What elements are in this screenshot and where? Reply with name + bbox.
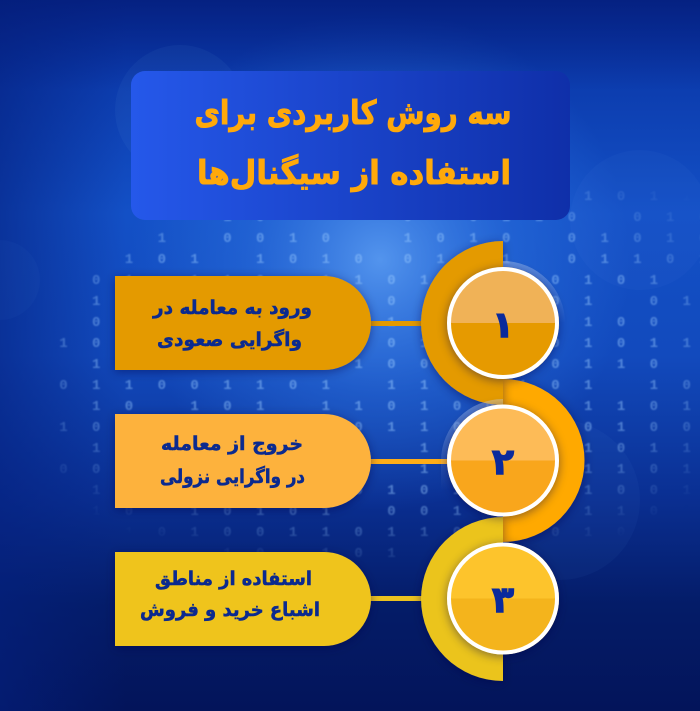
card 2: در واگرایی نزولی	[160, 465, 305, 488]
arc 3	[421, 517, 503, 681]
card 3: اشباع خرید و فروش	[140, 599, 320, 621]
title heading: استفاده از سیگنال‌ها	[197, 153, 511, 192]
step 2 badge	[447, 404, 559, 516]
title heading: سه روش کاربردی برای	[194, 93, 512, 133]
step 3 badge: ۳	[492, 580, 514, 621]
connector lines	[365, 321, 455, 601]
step 1 badge	[447, 267, 559, 379]
card 3: استفاده از مناطق	[155, 568, 312, 590]
step 2 badge: ۲	[492, 442, 514, 483]
card 2: خروج از معامله	[161, 433, 303, 455]
title heading	[194, 93, 512, 192]
card 1	[115, 276, 371, 370]
arc 2	[503, 379, 584, 542]
binary digits pattern	[10, 189, 700, 562]
step 1 badge: ۱	[492, 305, 514, 346]
card 3	[115, 552, 371, 646]
title panel	[131, 71, 570, 220]
card 1: ورود به معامله در	[152, 297, 312, 319]
card 2	[115, 414, 371, 508]
circle halos	[441, 261, 565, 490]
step 3 badge	[447, 542, 559, 654]
card 1: واگرایی صعودی	[157, 328, 302, 351]
arc 1	[421, 241, 503, 405]
